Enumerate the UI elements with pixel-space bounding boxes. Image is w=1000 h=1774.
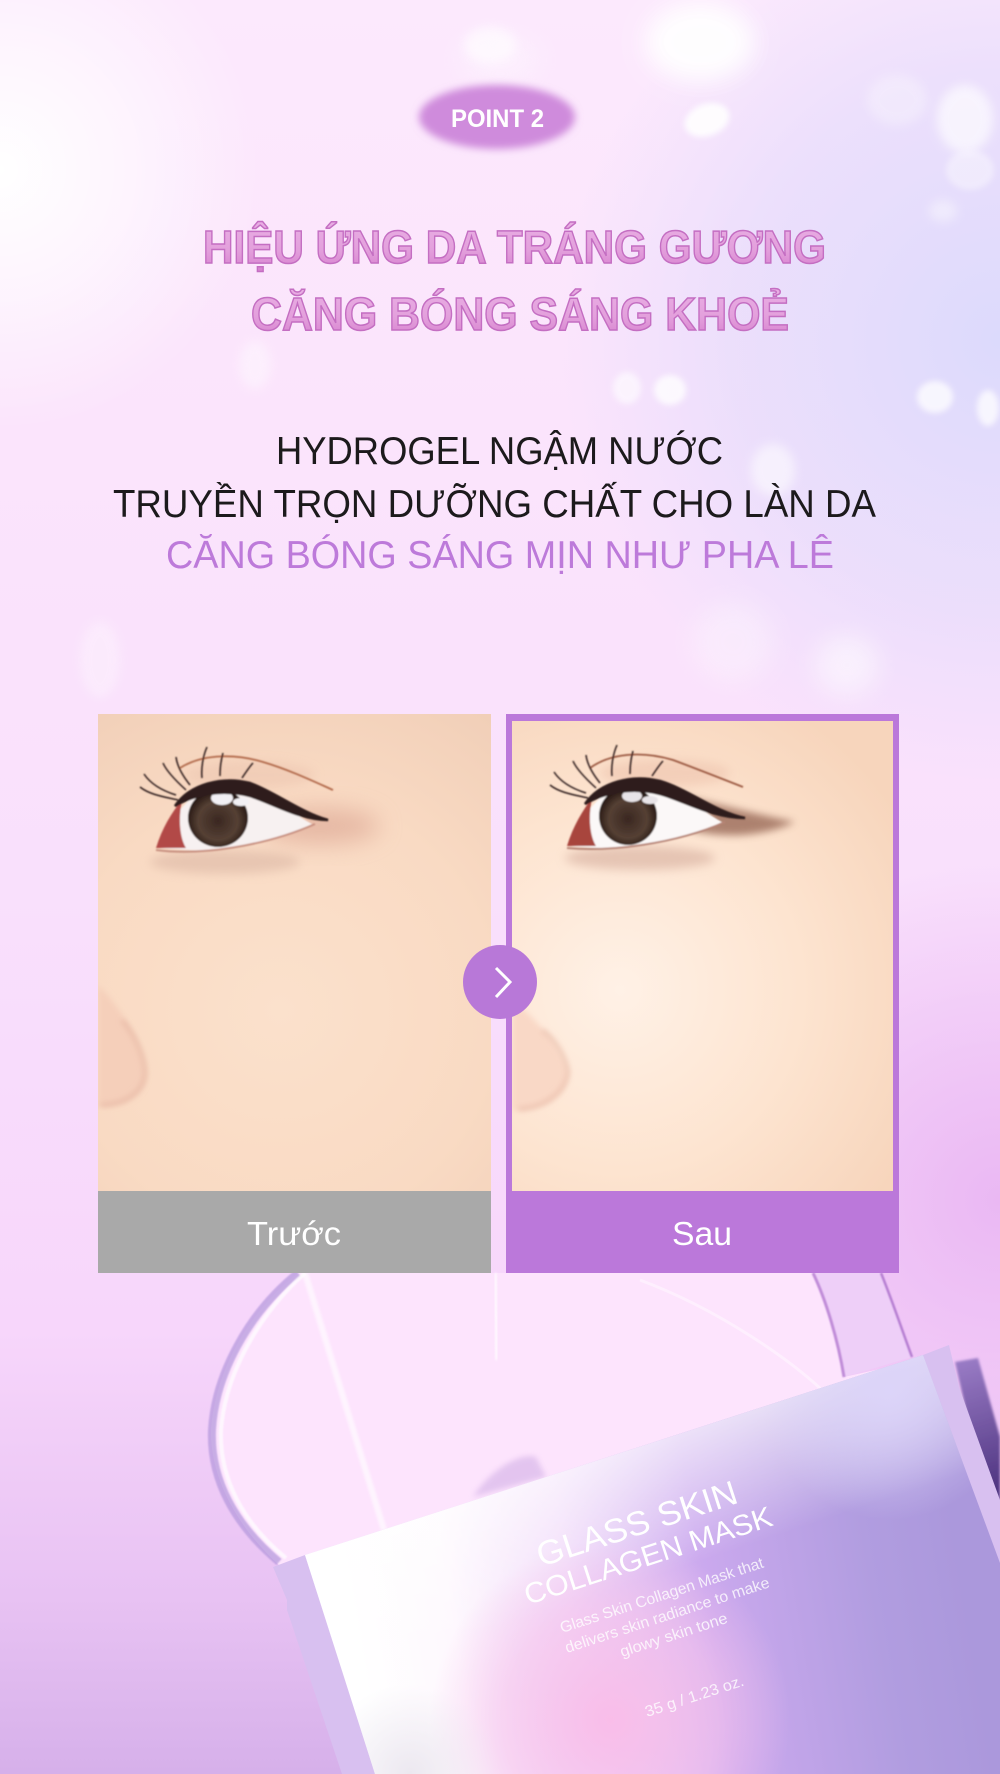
nose [512,1010,566,1108]
bokeh lights [80,2,999,698]
outer eyeliner shadow [680,795,795,835]
pack text [520,1474,777,1721]
purple frame [506,714,899,1273]
arrow button [463,945,537,1019]
product: hydrogel mask on dish [211,1273,1000,1774]
label bar: Trước [98,1191,491,1273]
pack text: Glass Skin Collagen Mask that [558,1555,766,1637]
before photo [98,714,491,1191]
title: HIỆU ỨNG DA TRÁNG GƯƠNG [203,221,826,273]
lashes [140,747,253,800]
pack body [300,1350,1000,1774]
title: CĂNG BÓNG SÁNG KHOẺ [251,288,789,340]
title [203,221,826,340]
pack text: GLASS SKIN [532,1474,742,1575]
pack text: glowy skin tone [618,1610,730,1661]
pack text: delivers skin radiance to make [563,1575,772,1657]
eyelid tone [600,759,730,787]
eye [140,747,333,852]
after photo [512,721,893,1191]
body text: CĂNG BÓNG SÁNG MỊN NHƯ PHA LÊ [166,534,834,577]
badge: POINT 2: POINT 2 [451,105,544,133]
eye [550,745,745,849]
pack seal [273,1345,1000,1774]
body text: HYDROGEL NGẬM NƯỚC [276,430,723,473]
glass rim [212,1273,298,1562]
nose [100,992,142,1102]
body text: TRUYỀN TRỌN DƯỠNG CHẤT CHO LÀN DA [113,482,876,526]
label bar: Trước: Trước [247,1215,341,1252]
under-eye and outer shadow [260,808,380,844]
shadow on sheet [473,1456,546,1497]
hydrogel sheet [211,1273,920,1565]
pack text: COLLAGEN MASK [520,1501,777,1612]
body text [113,430,876,577]
pack drop shadow [955,1358,1000,1560]
pack text: 35 g / 1.23 oz. [643,1673,746,1721]
badge: POINT 2 [419,85,575,149]
mask centre fold [305,1273,384,1530]
lashes [550,745,663,798]
panel: after [506,714,899,1273]
label: Sau: Sau [672,1215,732,1252]
panel: before [98,714,491,1273]
right strap [813,1273,912,1377]
eyelid tone [192,764,308,786]
